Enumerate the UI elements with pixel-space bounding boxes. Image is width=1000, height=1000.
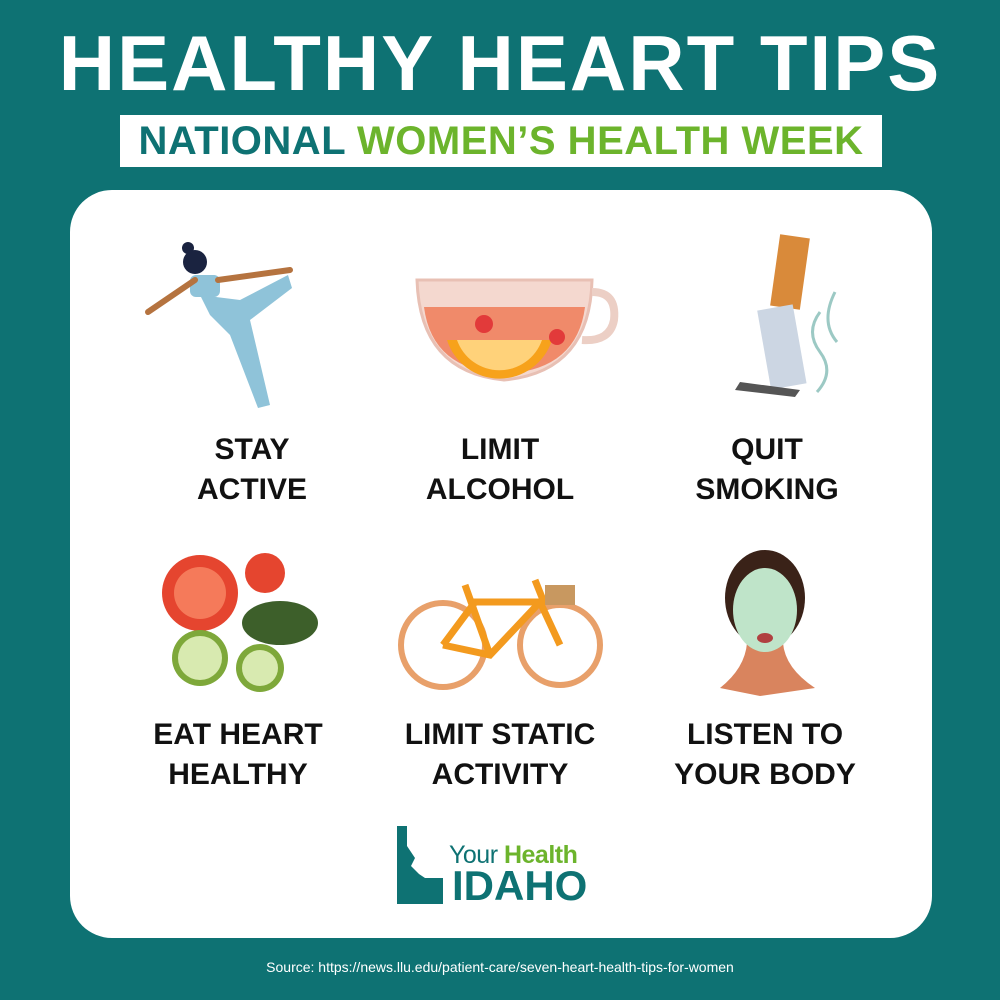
icon: cigarette: [735, 234, 838, 397]
icon: yoga woman: [145, 242, 293, 408]
label: listen to your body: [674, 718, 856, 791]
icon: tea cup: [416, 278, 618, 382]
icon: face mask woman: [720, 550, 815, 696]
source: Source: https://news.llu.edu/patient-care/seven-heart-health-tips-for-women: [266, 959, 734, 975]
label: limit static activity: ACTIVITY: [432, 758, 568, 791]
label: limit static activity: [405, 718, 595, 791]
title: HEALTHY HEART TIPS: [59, 19, 941, 107]
label: stay active: ACTIVE: [197, 473, 307, 506]
label: eat heart healthy: [153, 718, 323, 791]
panel: tips: [70, 190, 932, 938]
icon: vegetables: [162, 553, 318, 692]
label: quit smoking: QUIT: [731, 433, 803, 466]
label: limit alcohol: [426, 433, 574, 506]
logo: [397, 826, 587, 909]
label: eat heart healthy: HEALTHY: [168, 758, 308, 791]
label: limit alcohol: LIMIT: [461, 433, 539, 466]
label: eat heart healthy: EAT HEART: [153, 718, 323, 751]
label: limit alcohol: ALCOHOL: [426, 473, 574, 506]
label: quit smoking: [695, 433, 839, 506]
icon: idaho shape: [397, 826, 443, 904]
logo text: Your Health: [449, 841, 577, 869]
logo: IDAHO: [452, 862, 587, 909]
label: listen to your body: LISTEN TO: [687, 718, 843, 751]
subtitle banner: NATIONAL WOMEN’S HEALTH WEEK: [138, 119, 864, 163]
label: quit smoking: SMOKING: [695, 473, 839, 506]
label: listen to your body: YOUR BODY: [674, 758, 856, 791]
icon: bicycle: [398, 578, 603, 690]
label: limit static activity: LIMIT STATIC: [405, 718, 595, 751]
label: stay active: STAY: [214, 433, 290, 466]
label: stay active: [197, 433, 307, 506]
